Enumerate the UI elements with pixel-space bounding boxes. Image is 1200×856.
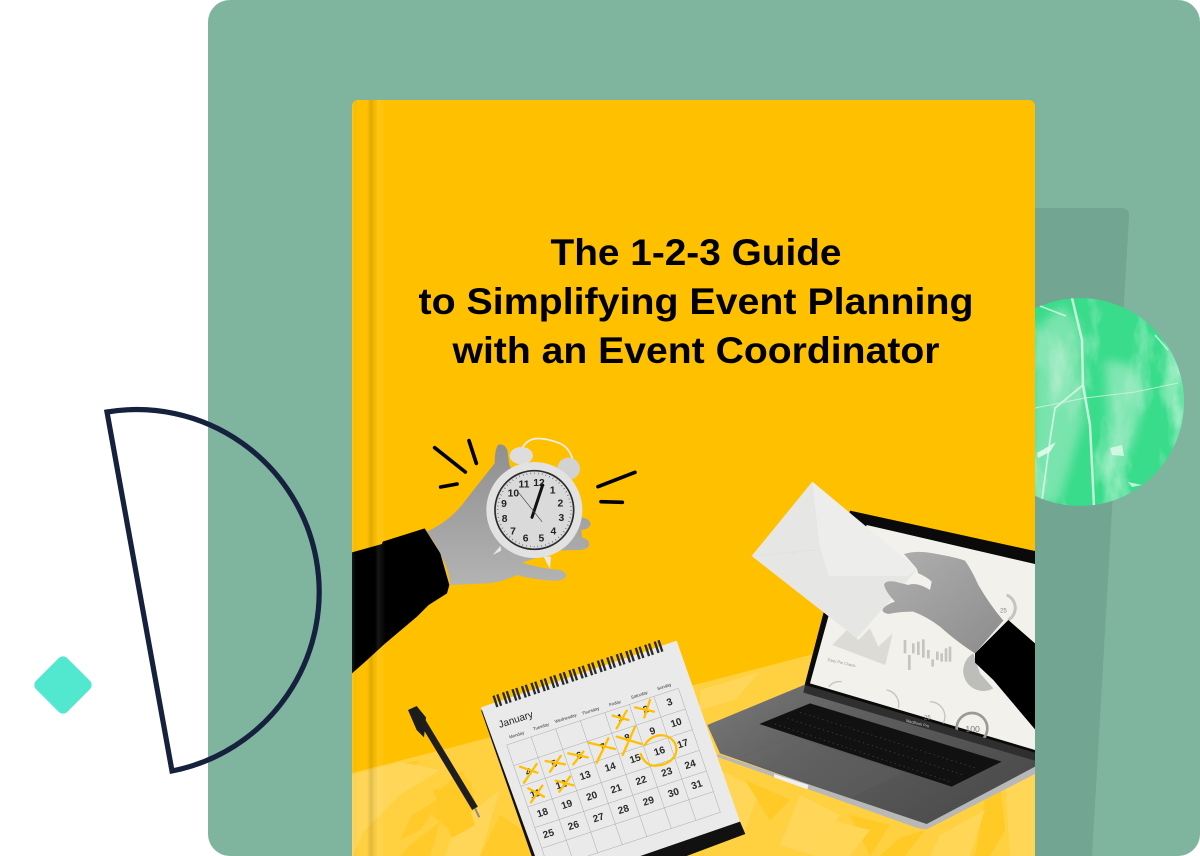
envelope [752,482,917,638]
calendar dates: 14 [603,761,618,775]
on-screen charts [827,595,1015,744]
trackpad [844,796,850,798]
calendar dates [524,697,704,841]
month and weekday labels: January [497,709,535,731]
calendar dates: 23 [660,766,674,780]
calendar dates: 18 [536,806,550,820]
calendar dates: 10 [669,716,684,730]
on-screen charts: Easy Pie Charts [827,657,856,668]
clock numerals: 7 [510,526,516,537]
calendar dates: 30 [667,786,681,800]
calendar dates: 15 [628,752,643,766]
calendar dates: 3 [665,697,674,709]
calendar dates: 26 [567,819,581,833]
clock numerals: 12 [533,478,545,489]
sleeve [975,620,1035,729]
calendar grid [507,688,720,856]
calendar dates: 2 [642,704,651,716]
calendar dates: 5 [550,758,559,771]
month and weekday labels: Tuesday [532,721,550,731]
on-screen charts: 100 [965,724,980,734]
clock body [486,462,582,558]
calendar dates: 6 [575,750,584,762]
decorative half circle outline [107,410,319,771]
event title [418,238,971,364]
decorative teal diamond [32,654,94,716]
spiral binding [494,645,663,702]
clock numerals: 3 [558,513,564,524]
calendar dates: 4 [524,767,533,779]
month and weekday labels: Friday [608,699,622,707]
book cover [352,100,1035,856]
crumpled paper background [352,654,1035,856]
event title: to Simplifying Event Planning [418,281,974,322]
clock numerals: 1 [550,486,556,497]
month and weekday labels: Saturday [630,690,649,700]
calendar dates: 17 [676,737,690,751]
clock numerals: 5 [538,534,544,545]
event title: with an Event Coordinator [451,330,940,371]
laptop with envelope: MacBook Pro [905,718,931,729]
calendar dates: 11 [529,787,543,801]
calendar dates: 9 [648,726,657,738]
on-screen charts: 25 [924,715,931,721]
yellow cross-outs and circled date [520,700,676,802]
calendar page [481,641,740,856]
laptop screen [803,511,1035,760]
month and weekday labels [497,682,673,740]
calendar dates: 8 [623,732,632,745]
hand holding envelope [883,552,1003,653]
clock hands [519,485,543,522]
calendar dates: 19 [560,798,574,812]
calendar dates: 22 [634,774,649,788]
calendar dates: 28 [617,803,631,817]
calendar dates: 27 [592,811,606,825]
hand holding alarm clock [352,438,635,673]
month and weekday labels: Sunday [657,682,673,691]
pen [408,706,479,817]
book spine shading [352,100,386,856]
laptop base [707,685,1035,826]
calendar dates: 21 [609,782,624,796]
clock numerals: 9 [501,499,507,510]
marble green disc [1035,298,1184,506]
calendar dates: 7 [598,742,607,754]
hand [427,444,591,585]
event title: The 1-2-3 Guide [550,232,842,273]
calendar dates: 25 [542,827,556,841]
sleeve [352,528,449,673]
calendar dates: 20 [585,790,599,804]
keyboard [759,703,1002,787]
clock numerals: 8 [502,514,508,525]
book back shadow [1030,208,1129,856]
calendar dates: 1 [616,712,625,725]
icon: motion lines [435,441,635,502]
calendar dates: 12 [554,778,569,792]
clock numerals: 2 [557,499,563,510]
calendar dates: 13 [578,769,593,783]
month and weekday labels: Wednesday [554,712,578,724]
clock numerals: 10 [508,488,519,499]
laptop with envelope [707,482,1035,829]
clock numerals: 4 [550,526,556,537]
calendar dates: 31 [690,778,704,792]
calendar dates: 29 [642,795,656,809]
calendar dates: 24 [683,758,698,772]
month and weekday labels: Monday [509,730,525,740]
clock numerals: 11 [519,479,530,490]
on-screen charts: 25 [1000,609,1007,615]
desk calendar [481,641,745,856]
clock numerals: 6 [523,534,529,545]
month and weekday labels: Thursday [581,705,601,716]
clock handle and bells [522,438,574,462]
calendar dates: 16 [653,745,667,759]
clock numerals [501,478,564,545]
calendar base [481,710,745,856]
